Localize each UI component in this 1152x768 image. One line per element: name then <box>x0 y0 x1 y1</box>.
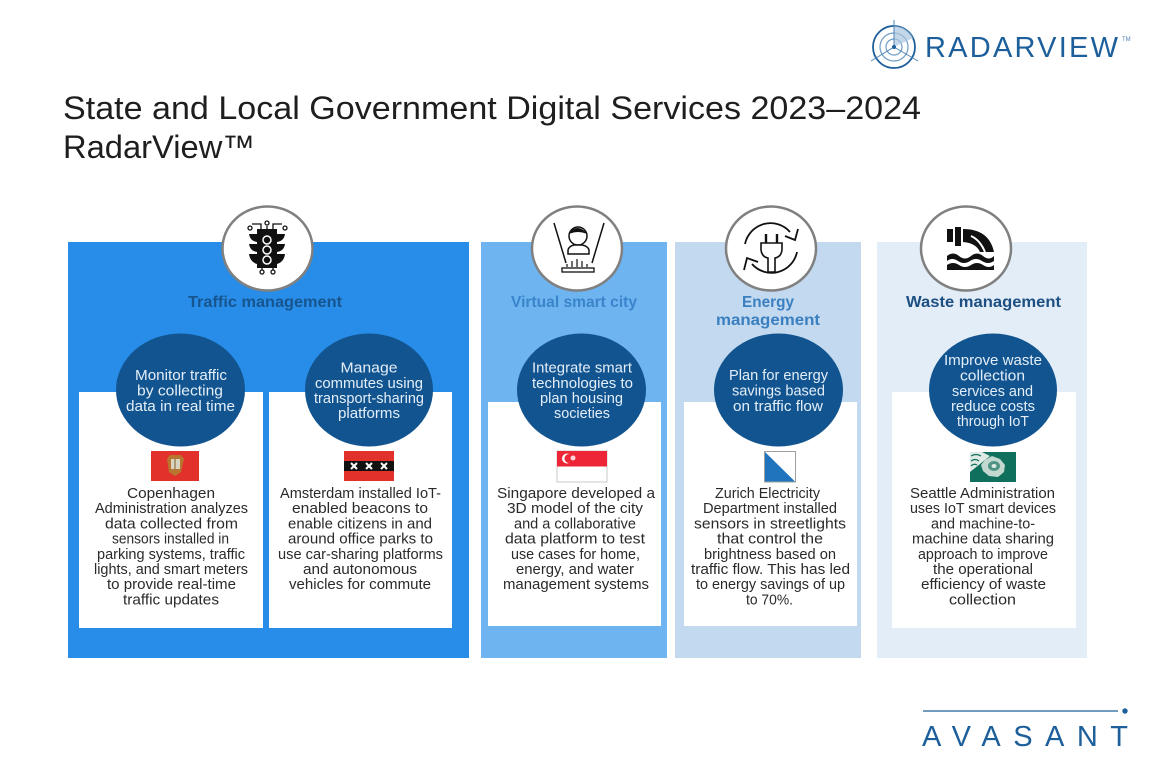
text block: Singapore: management systems <box>503 577 649 593</box>
callout: manage commutes: Manage <box>340 360 398 376</box>
callout: manage commutes: commutes using <box>315 376 423 392</box>
callout: plan for energy savings <box>714 334 843 446</box>
heading: waste management: Waste management <box>906 294 1061 311</box>
text block: Amsterdam: vehicles for commute <box>289 577 431 593</box>
text block: Copenhagen: to provide real-time <box>107 577 236 593</box>
callout: plan for energy savings: on traffic flow <box>733 399 824 415</box>
text block: Seattle: the operational <box>933 562 1033 578</box>
icon: virtual person <box>532 206 622 290</box>
text block: Seattle <box>910 486 1056 608</box>
text block: Amsterdam: use car-sharing platforms <box>278 547 443 563</box>
flag: Seattle <box>970 452 1016 482</box>
callout: improve waste collection: services and <box>952 384 1033 400</box>
text block: Copenhagen: parking systems, traffic <box>97 547 245 563</box>
callout: manage commutes: platforms <box>338 406 400 422</box>
callout: plan for energy savings: savings based <box>732 384 825 400</box>
heading: virtual smart city: Virtual smart city <box>511 294 637 311</box>
text card: Zurich <box>684 402 857 626</box>
heading: energy management: Energy <box>742 294 794 311</box>
heading: traffic management: Traffic management <box>188 294 342 311</box>
text block: Singapore: data platform to test <box>505 532 645 548</box>
text block: Singapore: use cases for home, <box>511 547 640 563</box>
heading: energy management: management <box>716 312 820 329</box>
text card: Copenhagen <box>79 392 263 628</box>
text block: Singapore: Singapore developed a <box>497 486 655 502</box>
panel: waste management <box>877 242 1087 658</box>
icon: traffic light <box>222 206 312 290</box>
callout: improve waste collection: reduce costs <box>951 399 1035 415</box>
text block: Seattle: collection <box>949 592 1016 608</box>
logo: RadarView: RADARVIEW <box>925 32 1119 64</box>
logo: RadarView: TM <box>1122 37 1131 43</box>
callout: integrate smart technologies: technologies to <box>532 376 633 392</box>
callout: manage commutes: transport-sharing <box>314 391 424 407</box>
callout: integrate smart technologies <box>517 334 646 446</box>
text block: Singapore: and a collaborative <box>514 516 636 532</box>
text block: Amsterdam: and autonomous <box>303 562 417 578</box>
callout: integrate smart technologies: Integrate smart <box>532 360 632 376</box>
text block: Seattle: efficiency of waste <box>921 577 1046 593</box>
title: RadarView™ <box>63 129 255 165</box>
text block: Copenhagen: Administration analyzes <box>95 501 248 517</box>
text block: Zurich: to energy savings of up <box>696 577 845 593</box>
callout: improve waste collection: through IoT <box>957 414 1029 430</box>
callout: monitor traffic: Monitor traffic <box>135 368 227 384</box>
text block: Amsterdam: around office parks to <box>288 532 433 548</box>
text block: Zurich: brightness based on <box>704 547 836 563</box>
text block: Singapore: energy, and water <box>516 562 634 578</box>
icon: energy plug <box>726 206 816 290</box>
callout: integrate smart technologies: societies <box>554 406 610 422</box>
callout: monitor traffic: data in real time <box>126 399 235 415</box>
heading: energy management <box>716 294 820 329</box>
text block: Zurich: Department installed <box>703 501 837 517</box>
text block: Zurich: traffic flow. This has led <box>691 562 850 578</box>
callout: integrate smart technologies: plan housing <box>540 391 623 407</box>
panel: virtual smart city <box>481 242 667 658</box>
text block: Amsterdam: enable citizens in and <box>288 516 432 532</box>
text block: Zurich: Zurich Electricity <box>715 486 821 502</box>
callout: improve waste collection: Improve waste <box>944 353 1042 369</box>
text block: Seattle: and machine-to- <box>931 516 1035 532</box>
callout: manage commutes <box>305 334 433 446</box>
text block: Amsterdam: enabled beacons to <box>292 501 428 517</box>
text block: Amsterdam: Amsterdam installed IoT- <box>280 486 441 502</box>
text block: Copenhagen: lights, and smart meters <box>94 562 248 578</box>
callout: plan for energy savings: Plan for energy <box>729 368 829 384</box>
text card: Seattle <box>892 392 1076 628</box>
text card: Singapore <box>488 402 661 626</box>
text block: Seattle: machine data sharing <box>912 532 1054 548</box>
panel: traffic management <box>68 242 469 658</box>
logo: RadarView <box>871 20 1131 68</box>
title: State and Local Government Digital Services 2023–2024 <box>63 90 921 126</box>
text block: Seattle: uses IoT smart devices <box>910 501 1056 517</box>
text block: Zurich: to 70%. <box>746 592 793 608</box>
text block: Zurich: sensors in streetlights <box>694 516 846 532</box>
text block: Seattle: Seattle Administration <box>910 486 1055 502</box>
callout: monitor traffic: by collecting <box>137 384 223 400</box>
title <box>63 90 921 165</box>
text block: Zurich: that control the <box>717 532 823 548</box>
text block: Copenhagen: data collected from <box>105 516 238 532</box>
icon: waste pipe <box>921 206 1011 290</box>
text card: Amsterdam <box>269 392 452 628</box>
text block: Copenhagen: Copenhagen <box>127 486 215 502</box>
panel: energy management <box>675 242 861 658</box>
text block: Copenhagen: sensors installed in <box>112 532 229 548</box>
text block: Singapore <box>497 486 655 593</box>
flag: Copenhagen <box>151 451 199 481</box>
text block: Copenhagen: traffic updates <box>123 592 219 608</box>
flag: Singapore <box>557 451 607 482</box>
callout: improve waste collection <box>929 334 1057 446</box>
text block: Seattle: approach to improve <box>918 547 1048 563</box>
logo: Avasant: AVASANT <box>922 721 1128 753</box>
text block: Singapore: 3D model of the city <box>507 501 644 517</box>
text block: Amsterdam <box>278 486 443 593</box>
flag: Zurich <box>764 452 796 482</box>
text block: Copenhagen <box>94 486 248 608</box>
flag: Amsterdam <box>344 451 394 481</box>
callout: improve waste collection: collection <box>960 368 1025 384</box>
text block: Zurich <box>691 486 850 608</box>
callout: monitor traffic <box>116 334 245 446</box>
